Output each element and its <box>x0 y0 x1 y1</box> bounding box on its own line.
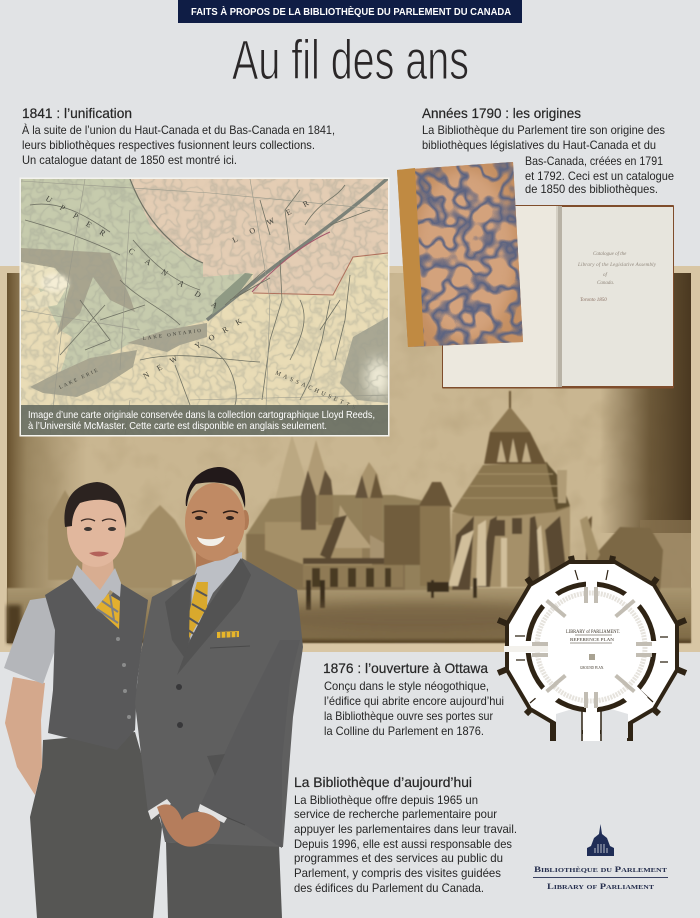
text block: 1790: de 1850 des bibliothèques. <box>525 183 658 196</box>
library turret <box>557 470 567 503</box>
text block: today: des édifices du Parlement du Canada. <box>294 882 484 895</box>
woman: collar <box>72 565 121 610</box>
man: hands <box>157 804 220 847</box>
library polygon drum <box>450 507 570 587</box>
spire tip <box>509 391 511 408</box>
man: head <box>185 467 249 561</box>
man: trousers <box>166 842 282 918</box>
west wing body <box>246 515 405 590</box>
text block: 1876: Conçu dans le style néogothique, <box>324 680 489 693</box>
woman: neck <box>82 550 114 592</box>
text block: today: La Bibliothèque offre depuis 1965 un <box>294 794 478 807</box>
title: Au fil des ans <box>232 28 469 91</box>
handwritten title page: Catalogue of the <box>593 252 627 257</box>
handwritten title page: Canada. <box>597 281 614 286</box>
text block: today: programmes et des services au public du <box>294 852 503 865</box>
library roof <box>452 462 570 516</box>
banner <box>178 0 522 23</box>
text block: 1790: et 1792. Ceci est un catalogue <box>525 170 674 183</box>
text block: 1841: Un catalogue datant de 1850 est montré ici. <box>22 154 237 167</box>
woman: head <box>64 482 126 567</box>
text block: 1790: Bas-Canada, créées en 1791 <box>525 155 663 168</box>
catalogue: open book <box>442 205 674 388</box>
plan titles: GROUND PLAN. <box>580 666 604 670</box>
text block: 1841: 1841 : l’unification <box>22 105 132 121</box>
hairline rivers and place-name texture <box>21 179 388 405</box>
map labels: MASSACHUSETTS <box>274 370 359 412</box>
text block: 1876: la Colline du Parlement en 1876. <box>324 725 484 738</box>
ghost spire <box>275 435 312 500</box>
ground <box>7 588 691 643</box>
text block: 1876 <box>323 660 504 738</box>
outer wall <box>507 562 677 732</box>
text block: 1841 <box>22 105 335 167</box>
map caption <box>21 405 388 435</box>
west annex label <box>504 646 548 652</box>
handwritten title page: Library of the Legislative Assembly <box>577 263 657 268</box>
handwritten title page: Toronto 1850 <box>580 298 607 303</box>
banner: FAITS À PROPOS DE LA BIBLIOTHÈQUE DU PARLEMENT DU CANADA <box>191 5 511 18</box>
map caption: Image d’une carte originale conservée dans la collection cartographique Lloyd Reeds, <box>28 410 375 421</box>
woman: vest buttons <box>116 637 131 719</box>
text block: 1876: la Bibliothèque ouvre ses portes sur <box>324 710 493 723</box>
long roof west block <box>246 495 452 590</box>
rivers <box>25 185 370 405</box>
text block: 1876: l’édifice qui abrite encore aujourd’hui <box>324 695 504 708</box>
man: neck <box>196 540 240 590</box>
logo: Library of Parliament: Bibliothèque du Parlement <box>534 865 667 874</box>
ocean <box>340 317 388 403</box>
woman: tie <box>96 594 120 629</box>
spine <box>397 168 424 347</box>
icon: library dome <box>587 824 614 856</box>
Lake Ontario <box>127 323 207 352</box>
bottom returns <box>582 708 601 741</box>
plan titles <box>566 628 621 670</box>
text block: 1876: 1876 : l’ouverture à Ottawa <box>323 660 488 676</box>
floor plan of the Library <box>498 556 686 741</box>
text block: today: Parlement, y compris des visites guidées <box>294 867 501 880</box>
east block <box>594 527 663 590</box>
catalogue: marbled cover <box>395 160 525 350</box>
Michigan peninsula <box>21 262 68 310</box>
radial walls <box>515 570 668 703</box>
text block: 1790: La Bibliothèque du Parlement tire son origine des <box>422 124 665 137</box>
sepia panel: Ottawa engraving of the Library <box>0 266 700 652</box>
text block: 1841: leurs bibliothèques respectives fusionnent leurs collections. <box>22 139 315 152</box>
map caption: à l’Université McMaster. Cette carte est disponible en anglais seulement. <box>28 421 327 432</box>
central tower <box>418 482 452 507</box>
text block: 1790: Années 1790 : les origines <box>422 105 581 121</box>
man: tie <box>188 582 208 640</box>
left dark corner <box>7 605 21 643</box>
text block: 1841: À la suite de l’union du Haut-Canada et du Bas-Canada en 1841, <box>22 124 335 137</box>
west towers <box>301 470 316 530</box>
entrance <box>583 700 600 741</box>
gallery band <box>537 593 645 701</box>
text block: today: appuyer les parlementaires dans leur travail. <box>294 823 517 836</box>
handwritten title page: of <box>603 273 608 278</box>
drum buttresses <box>452 516 568 590</box>
man: jacket buttons and seams <box>176 640 300 848</box>
map labels: LOWER <box>231 192 323 245</box>
woman: shirt sleeve <box>4 597 56 684</box>
carriages and figures <box>306 578 477 610</box>
inner ring <box>528 584 654 710</box>
map labels: CANADA <box>127 246 231 318</box>
Lower Canada <box>130 179 388 295</box>
woman: arm <box>5 677 45 795</box>
graticule <box>21 179 388 405</box>
Upper Canada <box>21 179 250 383</box>
text block: 1790 <box>422 105 674 196</box>
man: cuffs <box>148 799 227 823</box>
dome lantern <box>484 407 546 464</box>
map labels: UPPER <box>44 194 116 244</box>
text block: today: La Bibliothèque d’aujourd’hui <box>294 774 472 790</box>
plan titles: REFERENCE PLAN <box>570 638 614 642</box>
bottom cut-outs <box>556 706 628 740</box>
map labels <box>44 192 359 412</box>
map labels: LAKE ONTARIO <box>143 329 203 342</box>
text block: today <box>294 774 517 895</box>
man: shirt <box>190 552 242 642</box>
plan titles: LIBRARY of PARLIAMENT. <box>566 628 621 635</box>
text block: today: service de recherche parlementaire pour <box>294 808 497 821</box>
man: jacket <box>135 557 303 847</box>
Lake Huron <box>21 248 135 335</box>
Ottawa river and border <box>130 179 203 263</box>
man: lapels <box>165 558 251 675</box>
dark ground strip <box>240 602 600 634</box>
text block: today: Depuis 1996, elle est aussi responsable des <box>294 838 512 851</box>
handwritten title page <box>577 252 657 303</box>
St Lawrence <box>207 178 388 320</box>
ring openings <box>522 578 660 716</box>
map labels: LAKE ERIE <box>59 368 100 391</box>
logo: Library of Parliament <box>533 824 668 891</box>
alcove hatching <box>532 587 652 708</box>
logo: Library of Parliament: Library of Parliament <box>547 882 654 891</box>
buttresses <box>498 556 686 741</box>
woman: vest <box>45 578 148 750</box>
background left buildings <box>48 490 200 590</box>
Lake Erie <box>30 350 137 397</box>
map: Upper and Lower Canada <box>20 178 390 436</box>
woman: skirt <box>30 732 162 918</box>
man: pocket square <box>217 631 239 638</box>
text block: 1790: bibliothèques législatives du Haut-Canada et du <box>422 139 656 152</box>
map labels: NEW YORK <box>142 312 252 381</box>
